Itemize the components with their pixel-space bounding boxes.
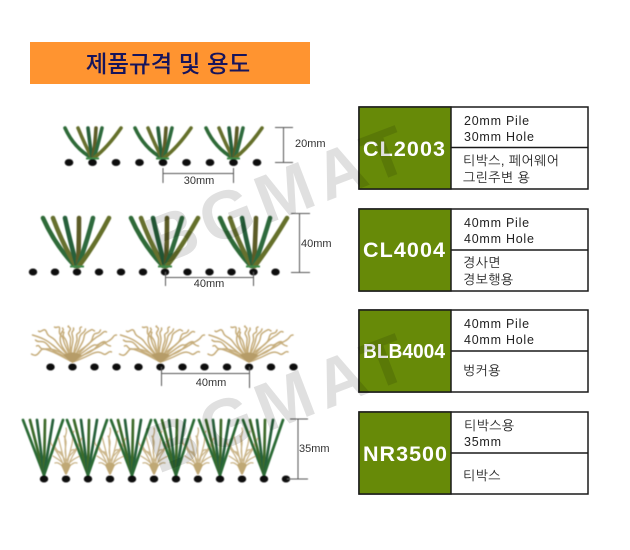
spec table: NR3500 [359, 412, 588, 494]
hole dots row 4 [40, 476, 290, 482]
spec table: CL2003: CL2003 [363, 137, 445, 161]
spec table: NR3500: 티박스용 [464, 418, 514, 433]
spec table: CL4004 [359, 209, 588, 291]
diagram: BLB4004 turf [32, 326, 298, 389]
beige tufts row 4 [50, 428, 258, 474]
spec table: BLB4004: 벙커용 [463, 363, 501, 378]
spec table: CL4004: 경보행용 [463, 272, 513, 287]
tuft row 1 [65, 128, 262, 158]
tuft row 2 [43, 218, 287, 266]
spec table: BLB4004: BLB4004 [363, 340, 446, 363]
label: 40mm spacing: 40mm [194, 278, 224, 290]
title [30, 42, 310, 84]
label: 30mm: 30mm [184, 175, 214, 187]
label: 35mm: 35mm [299, 443, 330, 455]
spec table: NR3500: NR3500 [363, 442, 447, 466]
hole dots row 1 [65, 159, 261, 166]
spec table: CL2003: 그린주변 용 [463, 170, 530, 185]
spec table: BLB4004: 40mm Pile [464, 317, 530, 331]
spec table: CL2003: 30mm Hole [464, 130, 535, 144]
diagram: CL2003 turf [65, 128, 326, 187]
label: 40mm spacing: 40mm [196, 377, 226, 389]
green tufts row 4 [23, 420, 283, 475]
label: 20mm: 20mm [295, 138, 326, 150]
spec table: CL2003: 20mm Pile [464, 114, 530, 128]
spec table: CL4004: CL4004 [363, 238, 445, 262]
watermark bottom: BGMAT [136, 317, 424, 488]
hole dots row 2 [29, 268, 280, 276]
watermark top: BGMAT [136, 109, 424, 280]
spec table: NR3500: 티박스 [463, 468, 501, 483]
title: 제품규격 및 용도 [86, 45, 250, 79]
spec table: CL4004: 경사면 [463, 255, 501, 270]
spec table: BLB4004: 40mm Hole [464, 333, 535, 347]
label: 40mm height: 40mm [301, 238, 332, 250]
spec table: CL4004: 40mm Hole [464, 232, 535, 246]
spec table: CL2003: 티박스, 페어웨어 [463, 153, 559, 168]
measure lines row 2 [166, 214, 310, 286]
measure lines row 1 [163, 128, 293, 183]
hole dots row 3 [46, 364, 298, 370]
measure lines row 4 [287, 419, 308, 479]
diagram: CL4004 turf [29, 214, 332, 290]
spec table: BLB4004 [359, 310, 588, 392]
spec table: CL4004: 40mm Pile [464, 216, 530, 230]
diagram: NR3500 turf [23, 419, 330, 482]
curly tufts row 3 [32, 326, 293, 362]
spec table: CL2003 [359, 107, 588, 189]
spec table: NR3500: 35mm [464, 435, 502, 449]
measure lines row 3 [162, 367, 250, 388]
